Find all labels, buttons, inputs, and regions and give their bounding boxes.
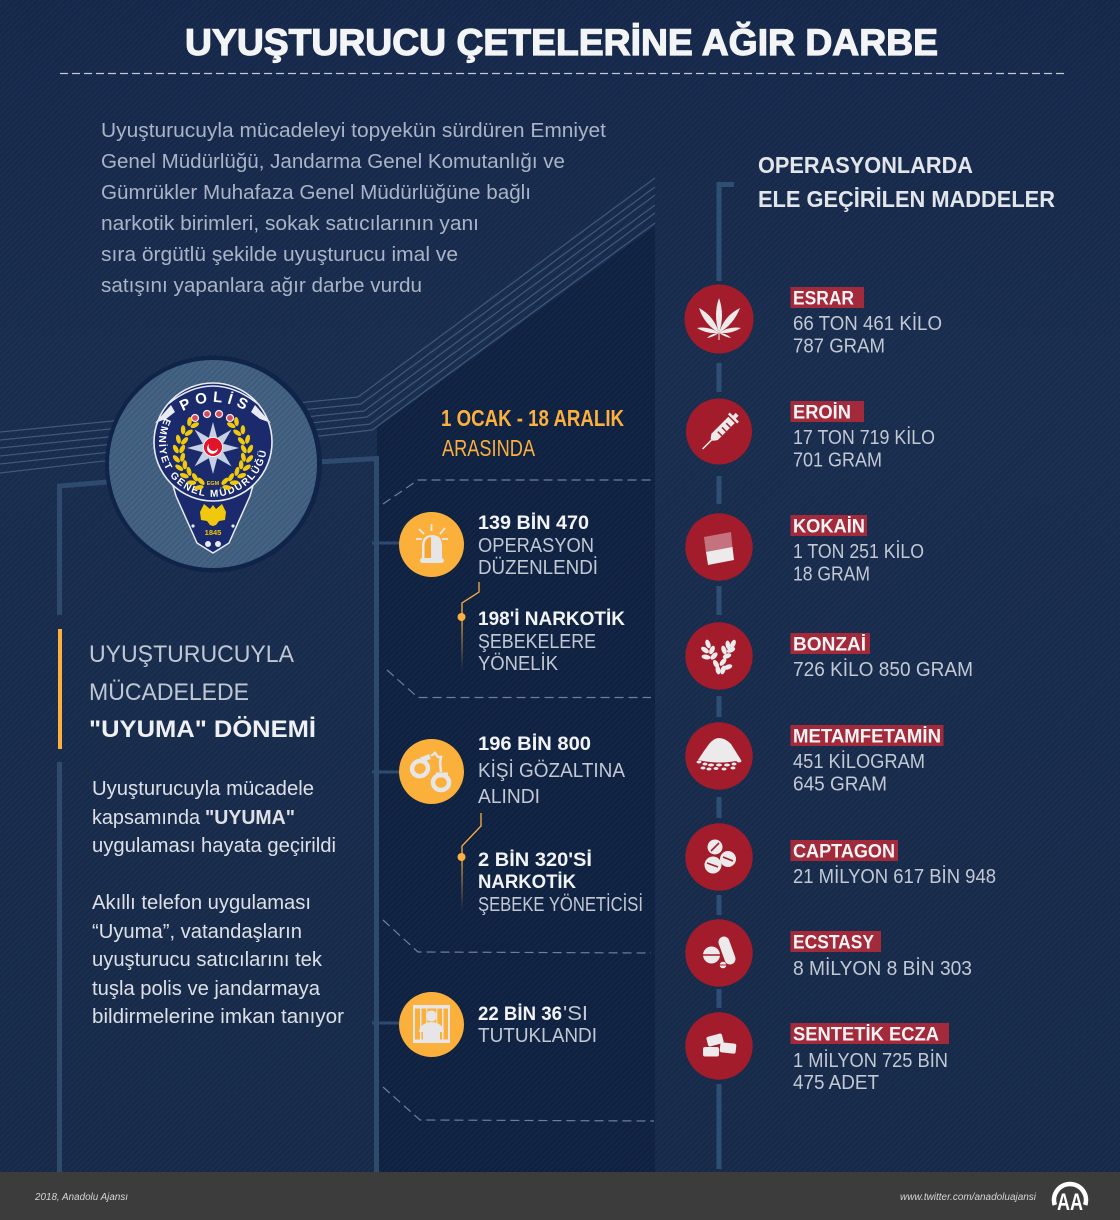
item: sentetik ecza bbox=[790, 1023, 949, 1094]
right heading bbox=[758, 152, 1055, 212]
item: esrar bbox=[790, 287, 942, 358]
icon: bonzai leaves bbox=[685, 622, 753, 690]
item: captagon bbox=[790, 840, 996, 888]
stat: detained bbox=[478, 734, 626, 808]
icon: cannabis leaf bbox=[684, 284, 754, 354]
item: sentetik ecza: SENTETİK ECZA bbox=[793, 1024, 939, 1046]
left paragraph: Uyuşturucuyla mücadele bbox=[92, 778, 314, 800]
stat: detained: ALINDI bbox=[478, 786, 540, 808]
icon: captagon tablets bbox=[685, 823, 753, 891]
intro text: satışını yapanlara ağır darbe vurdu bbox=[101, 275, 422, 297]
intro text: Uyuşturucuyla mücadeleyi topyekün sürdüren Emniyet bbox=[101, 120, 606, 142]
icon: powder pile bbox=[685, 722, 753, 790]
police badge: POLİS bbox=[179, 391, 248, 411]
item: metamfetamin: 645 GRAM bbox=[793, 774, 887, 796]
item: captagon: CAPTAGON bbox=[793, 842, 895, 862]
item: esrar: 66 TON 461 KİLO bbox=[793, 312, 942, 335]
item: sentetik ecza: 1 MİLYON 725 BİN bbox=[793, 1049, 948, 1072]
date range: ARASINDA bbox=[442, 435, 536, 461]
item: bonzai: BONZAİ bbox=[793, 634, 866, 656]
intro text bbox=[101, 120, 606, 297]
stat: network leaders: NARKOTİK bbox=[478, 872, 576, 893]
item: metamfetamin bbox=[790, 725, 944, 796]
title: UYUŞTURUCU ÇETELERİNE AĞIR DARBE bbox=[185, 22, 938, 63]
left paragraph: uygulaması hayata geçirildi bbox=[92, 835, 336, 857]
icon: cocaine bag bbox=[685, 513, 753, 581]
item: metamfetamin: 451 KİLOGRAM bbox=[793, 750, 925, 773]
police badge: EGM bbox=[207, 481, 220, 487]
icon: AA logo: AA bbox=[1057, 1189, 1083, 1216]
left paragraph: uyuşturucu satıcılarını tek bbox=[92, 949, 323, 971]
item: eroin bbox=[790, 401, 935, 472]
left paragraph: tuşla polis ve jandarmaya bbox=[92, 978, 321, 1000]
item: bonzai bbox=[790, 633, 973, 681]
left paragraph: "UYUMA" bbox=[205, 807, 295, 829]
item: eroin: 17 TON 719 KİLO bbox=[793, 426, 935, 449]
timeline line bbox=[719, 184, 734, 1169]
date range bbox=[441, 405, 624, 461]
left heading: "UYUMA" DÖNEMİ bbox=[89, 716, 316, 743]
connector: yellow 2 bbox=[458, 813, 481, 911]
stat: network leaders bbox=[478, 850, 643, 916]
stat: arrested: 22 BİN 36 bbox=[478, 1004, 562, 1025]
badge shield tail bbox=[172, 482, 254, 553]
item: kokain: KOKAİN bbox=[793, 516, 865, 538]
icon: prisoner behind bars bbox=[399, 992, 464, 1057]
stat: detained: 196 BİN 800 bbox=[478, 734, 591, 755]
item: metamfetamin: METAMFETAMİN bbox=[793, 726, 941, 748]
icon: synthetic pills bbox=[685, 1012, 753, 1080]
badge laurel bbox=[171, 415, 255, 493]
stat: network leaders: 2 BİN 320'Sİ bbox=[478, 850, 592, 871]
right heading: OPERASYONLARDA bbox=[758, 152, 973, 178]
badge eagle bbox=[200, 504, 226, 526]
item: captagon: 21 MİLYON 617 BİN 948 bbox=[793, 865, 996, 888]
badge ring bbox=[154, 383, 272, 501]
left paragraph: Akıllı telefon uygulaması bbox=[92, 892, 311, 914]
intro text: Gümrükler Muhafaza Genel Müdürlüğüne bağlı bbox=[101, 182, 531, 204]
icon: syringe bbox=[686, 398, 752, 464]
icon: siren bbox=[399, 512, 464, 577]
left paragraph: bildirmelerine imkan tanıyor bbox=[92, 1006, 344, 1028]
left heading: MÜCADELEDE bbox=[89, 679, 249, 706]
item: eroin: 701 GRAM bbox=[793, 450, 882, 472]
left heading bbox=[58, 629, 316, 749]
stat: operations: DÜZENLENDİ bbox=[478, 556, 598, 579]
badge ribbon bbox=[168, 386, 258, 416]
date range: 1 OCAK - 18 ARALIK bbox=[441, 405, 624, 431]
item: kokain: 18 GRAM bbox=[793, 564, 870, 586]
connector: yellow 1 bbox=[458, 582, 479, 671]
right heading: ELE GEÇİRİLEN MADDELER bbox=[758, 186, 1055, 212]
intro text: narkotik birimleri, sokak satıcılarının yanı bbox=[101, 213, 479, 235]
icon: ecstasy pills bbox=[685, 919, 753, 987]
footer: www.twitter.com/anadoluajansi bbox=[900, 1192, 1037, 1203]
item: eroin: EROİN bbox=[793, 402, 851, 424]
police badge: EMNİYET GENEL MÜDÜRLÜĞÜ bbox=[159, 418, 266, 497]
item: sentetik ecza: 475 ADET bbox=[793, 1072, 879, 1094]
item: kokain: 1 TON 251 KİLO bbox=[793, 540, 924, 563]
stat: arrested: TUTUKLANDI bbox=[478, 1025, 597, 1047]
stat: detained: KİŞİ GÖZALTINA bbox=[478, 759, 626, 782]
stat: operations: OPERASYON bbox=[478, 535, 594, 557]
stat: operations bbox=[478, 513, 598, 579]
item: kokain bbox=[790, 515, 924, 586]
footer: 2018, Anadolu Ajansı bbox=[34, 1192, 128, 1203]
police badge: 1845 bbox=[205, 528, 221, 537]
left heading: UYUŞTURUCUYLA bbox=[89, 641, 294, 668]
stat: narcotics networks: YÖNELİK bbox=[478, 652, 559, 675]
icon: AA logo bbox=[1054, 1184, 1086, 1216]
item: bonzai: 726 KİLO 850 GRAM bbox=[793, 658, 973, 681]
left paragraph bbox=[92, 778, 344, 1028]
stat: narcotics networks: ŞEBEKELERE bbox=[478, 631, 596, 653]
item: ecstasy: ECSTASY bbox=[793, 932, 874, 954]
stat: arrested: 'SI bbox=[563, 1003, 588, 1025]
panel: dark central column bbox=[377, 226, 655, 1172]
stat: operations: 139 BİN 470 bbox=[478, 513, 589, 534]
stat: narcotics networks bbox=[478, 609, 625, 675]
stat: network leaders: ŞEBEKE YÖNETİCİSİ bbox=[478, 893, 643, 916]
icon: handcuffs bbox=[399, 739, 464, 804]
connector lines: left frame bbox=[60, 458, 402, 1172]
footer bbox=[0, 1172, 1120, 1220]
police badge bbox=[105, 356, 322, 572]
intro text: sıra örgütlü şekilde uyuşturucu imal ve bbox=[101, 244, 458, 266]
stat: arrested bbox=[478, 1003, 597, 1047]
badge stars bbox=[192, 410, 234, 422]
intro text: Genel Müdürlüğü, Jandarma Genel Komutanlığı ve bbox=[101, 151, 565, 173]
item: ecstasy: 8 MİLYON 8 BİN 303 bbox=[793, 957, 972, 980]
left paragraph: kapsamında bbox=[92, 807, 201, 829]
item: esrar: 787 GRAM bbox=[793, 336, 885, 358]
stat: narcotics networks: 198'İ NARKOTİK bbox=[478, 609, 625, 630]
item: ecstasy bbox=[790, 931, 972, 980]
item: esrar: ESRAR bbox=[793, 288, 854, 310]
badge star emblem bbox=[187, 422, 239, 474]
left paragraph: “Uyuma”, vatandaşların bbox=[92, 921, 302, 943]
